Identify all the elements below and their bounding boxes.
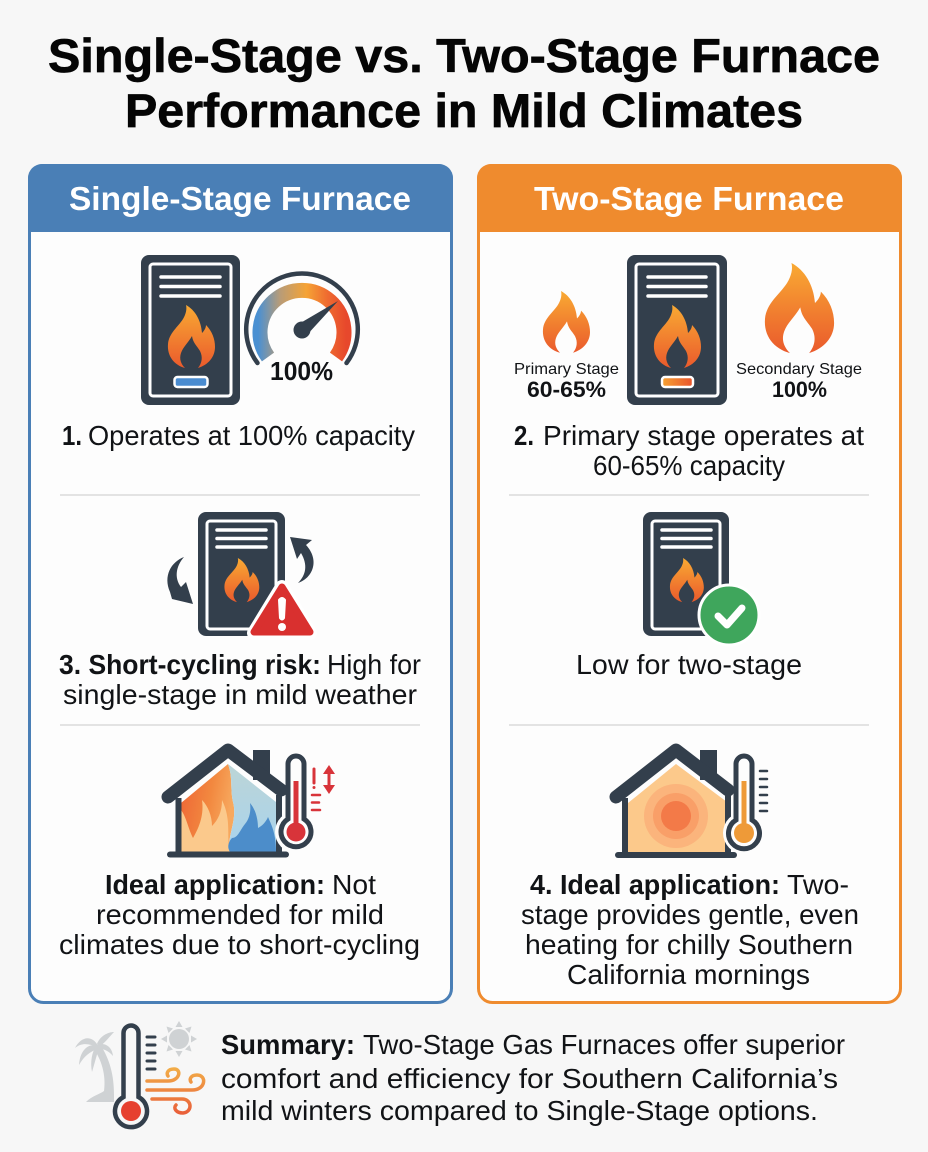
title — [48, 29, 880, 137]
text: short-cycling risk: single-stage in mild weather — [63, 679, 417, 710]
icon: palm tree — [75, 1032, 114, 1102]
icon: furnace with full-capacity gauge — [141, 255, 358, 405]
text: short-cycling risk — [59, 649, 421, 710]
text: ideal application two-stage: California mornings — [567, 959, 810, 990]
icon: sun — [161, 1021, 197, 1057]
icon: furnace with primary and secondary flames: 100% — [772, 377, 827, 402]
icon: furnace with primary and secondary flames: 60-65% — [527, 377, 606, 402]
text: ideal application two-stage: stage provides gentle, even — [521, 899, 859, 930]
icon: wind lines — [147, 1069, 204, 1113]
text: ideal application two-stage — [521, 869, 859, 990]
text: ideal application single-stage: Ideal application: — [105, 869, 325, 900]
summary text: Two-Stage Gas Furnaces offer superior — [363, 1029, 845, 1060]
text: ideal application two-stage: heating for chilly Southern — [525, 929, 853, 960]
text: ideal application single-stage: climates due to short-cycling — [59, 929, 420, 960]
text: short-cycling risk: High for — [327, 649, 421, 680]
summary text: Summary: — [221, 1029, 355, 1060]
text: operates at 100%: Operates at 100% capacity — [88, 420, 415, 451]
icon: mild climate thermometer — [75, 1021, 204, 1127]
summary text: mild winters compared to Single-Stage options. — [221, 1095, 818, 1126]
text: ideal application two-stage: 4. Ideal application: — [530, 869, 780, 900]
icon: furnace with primary and secondary flames: Secondary Stage — [736, 361, 862, 378]
panel header: two-stage — [477, 164, 902, 232]
icon: furnace with primary and secondary flames — [514, 255, 862, 405]
text: ideal application single-stage: Not — [332, 869, 376, 900]
panel: single-stage furnace — [28, 164, 453, 1002]
panel header: single-stage — [28, 164, 453, 232]
text: primary stage capacity: Primary stage operates at — [543, 420, 864, 451]
text: ideal application single-stage: recommended for mild — [96, 899, 384, 930]
text: ideal application two-stage: Two- — [787, 869, 849, 900]
icon: house with even heat — [616, 750, 767, 855]
title: Performance in Mild Climates — [125, 84, 803, 137]
summary text — [221, 1029, 845, 1126]
icon: furnace with primary and secondary flames: Primary Stage — [514, 361, 619, 378]
icon: house with uneven heat — [168, 750, 335, 854]
text: primary stage capacity: 60-65% capacity — [593, 450, 785, 481]
panel: two-stage furnace — [477, 164, 902, 1002]
text: operates at 100%: 1. — [62, 420, 82, 451]
text: low for two-stage: Low for two-stage — [576, 649, 802, 680]
text: ideal application single-stage — [59, 869, 420, 960]
icon: short-cycling furnace with warning — [167, 512, 314, 636]
text: primary stage capacity — [514, 420, 864, 481]
panel header: single-stage: Single-Stage Furnace — [69, 180, 411, 217]
icon: furnace with green check — [643, 512, 759, 645]
title: Single-Stage vs. Two-Stage Furnace — [48, 29, 880, 82]
text: short-cycling risk: 3. Short-cycling risk: — [59, 649, 321, 680]
icon: furnace with full-capacity gauge: 100% — [270, 356, 333, 386]
panel header: two-stage: Two-Stage Furnace — [534, 180, 844, 217]
text: primary stage capacity: 2. — [514, 420, 534, 451]
summary text: comfort and efficiency for Southern California’s — [221, 1063, 838, 1094]
